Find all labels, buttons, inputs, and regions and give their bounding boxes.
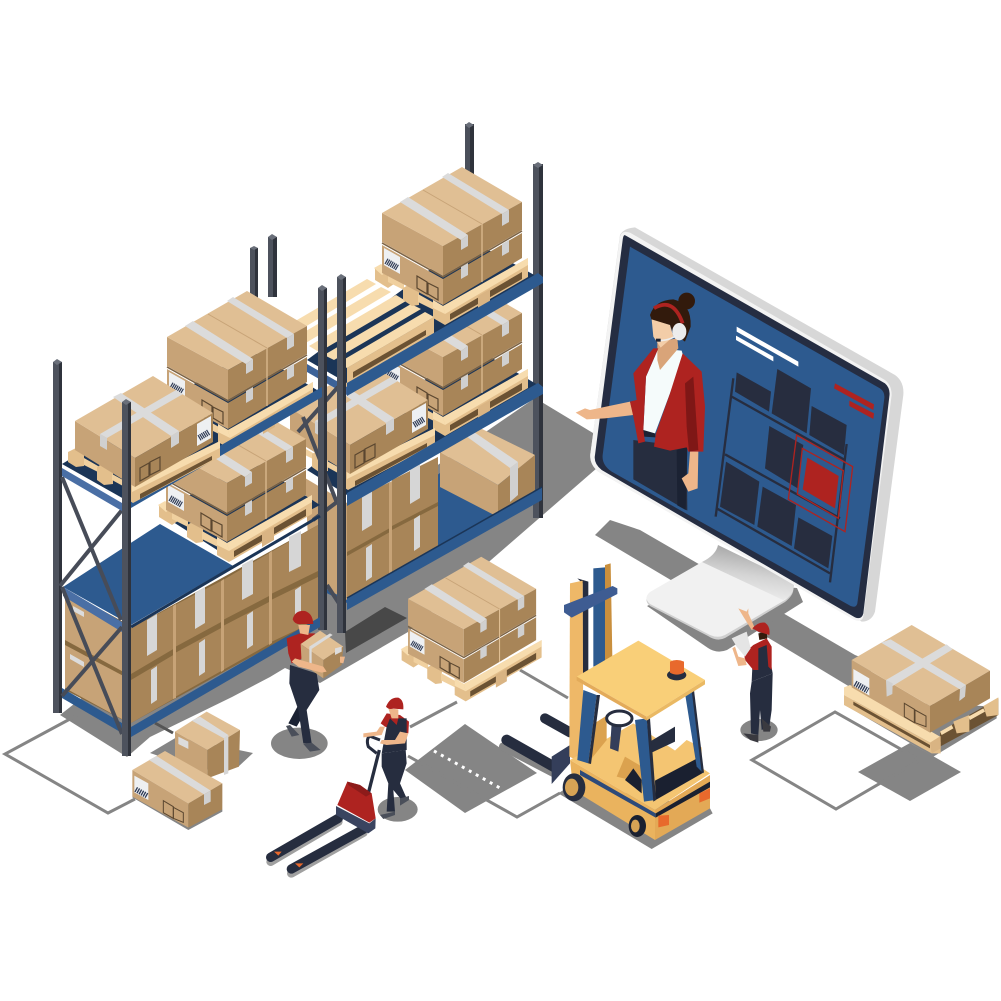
worker with clipboard [732,608,778,743]
cross taped pallet [283,363,435,490]
back box [175,712,240,778]
worker pushing truck [363,698,418,822]
monitor base [646,545,803,652]
ground deck [300,450,540,603]
tall right post [533,162,543,518]
side X braces [60,477,122,734]
cross taped box [68,376,220,503]
woman on screen [576,293,705,511]
floor shadows [60,398,961,813]
ground beam [347,487,542,610]
right shelf rack [280,122,543,633]
figures and truck [271,611,418,873]
pallet truck [271,736,380,873]
screen content: shelf map [716,327,874,582]
upper deck [62,350,322,511]
side brace [298,387,340,605]
empty pallet [280,279,434,386]
right pallet with box [844,625,998,757]
left shelf rack [53,234,327,756]
back posts [53,234,277,713]
ground beam [62,617,320,737]
post right [318,285,327,630]
front post [122,399,131,756]
monitor [576,227,903,622]
lower box columns [131,525,318,723]
middle deck [63,460,320,632]
front box [132,751,222,830]
bottom left face boxes [65,590,131,724]
upper beam [131,387,322,508]
second level deck [307,345,538,495]
single box [440,427,535,517]
forklift [503,563,713,849]
top beam [347,273,543,396]
rear post [465,122,474,224]
upper stacked pallet [159,291,313,449]
floor outlines [5,670,920,817]
box columns [305,457,438,600]
second beam [347,383,543,506]
center pallet with boxes [401,557,542,701]
monitor frame [590,227,903,622]
middle level pallet [158,404,312,562]
forklift and checking worker [503,563,778,849]
worker carrying box [271,611,345,759]
second level boxes pallet [374,278,528,436]
front post [337,274,346,633]
floor boxes [132,712,240,830]
top level deck [307,240,538,395]
top boxes pallet [374,167,528,325]
